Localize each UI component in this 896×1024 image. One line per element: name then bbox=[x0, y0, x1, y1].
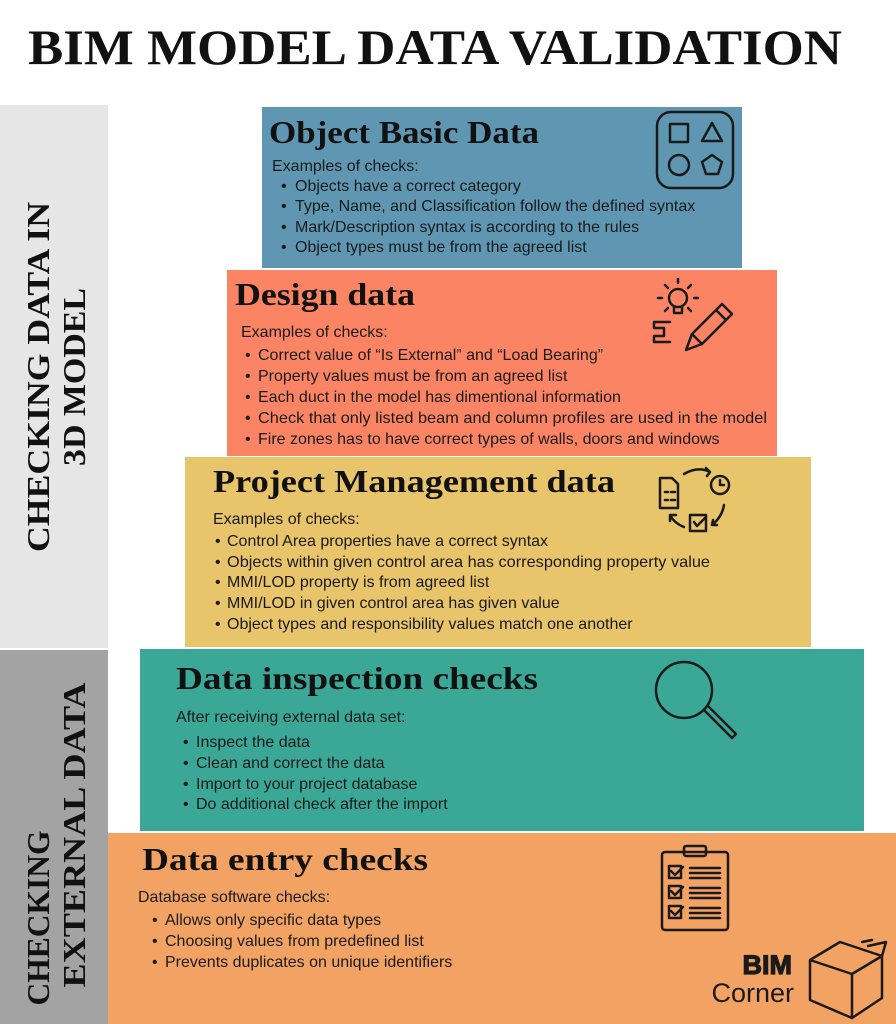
text: entry checks: Choosing values from predefined list bbox=[165, 933, 424, 950]
text: entry checks: Database software checks: bbox=[138, 889, 330, 906]
sidebar: checking data in 3D model: CHECKING DATA IN bbox=[20, 202, 56, 552]
heading: design data: Design data bbox=[235, 276, 415, 312]
sidebar: checking external data bbox=[0, 650, 108, 1024]
text: project management checks: • bbox=[215, 533, 221, 550]
sidebar: checking data in 3D model: 3D MODEL bbox=[56, 288, 92, 466]
text: design checks: Property values must be from an agreed list bbox=[258, 368, 568, 385]
text: inspection steps: Import to your project database bbox=[196, 776, 418, 793]
text: project management checks: • bbox=[215, 595, 221, 612]
heading: project management data: Project Management data bbox=[213, 463, 615, 499]
icon: lightbulb and pencil bbox=[654, 279, 732, 350]
sidebar: checking external data: CHECKING bbox=[20, 830, 56, 1006]
text: entry checks bbox=[138, 889, 452, 971]
text: design checks bbox=[241, 324, 767, 448]
text: design checks: Each duct in the model has dimentional information bbox=[258, 389, 621, 406]
text: inspection steps bbox=[176, 709, 448, 813]
text: entry checks: • bbox=[152, 912, 158, 929]
panel: design data bbox=[227, 270, 777, 456]
text: inspection steps: Clean and correct the data bbox=[196, 755, 385, 772]
text: object checks: • bbox=[281, 198, 287, 215]
panel: data entry checks bbox=[108, 833, 896, 1024]
title: BIM MODEL DATA VALIDATION bbox=[28, 19, 842, 75]
text: object checks: • bbox=[281, 219, 287, 236]
logo: BIM Corner: Corner bbox=[711, 978, 794, 1008]
logo: BIM Corner bbox=[711, 940, 886, 1018]
icon: shapes bbox=[657, 112, 733, 188]
text: object checks: • bbox=[281, 178, 287, 195]
sidebar: checking data in 3D model bbox=[0, 105, 108, 648]
text: object checks bbox=[272, 158, 695, 256]
text: project management checks: MMI/LOD in given control area has given value bbox=[227, 595, 560, 612]
text: entry checks: Prevents duplicates on unique identifiers bbox=[165, 954, 452, 971]
text: entry checks: Allows only specific data types bbox=[165, 912, 381, 929]
text: design checks: • bbox=[245, 410, 251, 427]
heading: data entry checks: Data entry checks bbox=[142, 841, 428, 877]
text: design checks: • bbox=[245, 431, 251, 448]
text: project management checks: Objects within given control area has corresponding property value bbox=[227, 554, 710, 571]
text: project management checks: Examples of checks: bbox=[213, 511, 360, 528]
text: project management checks: • bbox=[215, 554, 221, 571]
text: object checks: Examples of checks: bbox=[272, 158, 419, 175]
heading: data inspection checks: Data inspection checks bbox=[176, 660, 538, 696]
text: project management checks: • bbox=[215, 574, 221, 591]
text: object checks: Type, Name, and Classification follow the defined syntax bbox=[295, 198, 695, 215]
panel: project management data bbox=[185, 457, 811, 647]
sidebar: checking external data: EXTERNAL DATA bbox=[56, 682, 92, 988]
text: project management checks: • bbox=[215, 616, 221, 633]
text: object checks: • bbox=[281, 239, 287, 256]
text: entry checks: • bbox=[152, 954, 158, 971]
text: design checks: Correct value of “Is External” and “Load Bearing” bbox=[258, 347, 603, 364]
panel: object basic data bbox=[262, 107, 742, 268]
text: inspection steps: • bbox=[183, 734, 189, 751]
text: inspection steps: Do additional check after the import bbox=[196, 796, 448, 813]
text: project management checks bbox=[213, 511, 710, 633]
text: object checks: Mark/Description syntax is according to the rules bbox=[295, 219, 639, 236]
icon: cycle document clock bbox=[660, 468, 729, 531]
icon: magnifier bbox=[656, 662, 736, 738]
text: inspection steps: • bbox=[183, 796, 189, 813]
text: object checks: Object types must be from the agreed list bbox=[295, 239, 587, 256]
text: design checks: Check that only listed beam and column profiles are used in the model bbox=[258, 410, 767, 427]
text: design checks: • bbox=[245, 368, 251, 385]
text: entry checks: • bbox=[152, 933, 158, 950]
logo: BIM Corner: BIM bbox=[742, 950, 792, 980]
text: project management checks: Object types and responsibility values match one another bbox=[227, 616, 633, 633]
icon: clipboard checklist bbox=[662, 846, 728, 930]
text: design checks: Fire zones has to have correct types of walls, doors and windows bbox=[258, 431, 720, 448]
text: inspection steps: After receiving external data set: bbox=[176, 709, 405, 726]
text: design checks: • bbox=[245, 347, 251, 364]
text: project management checks: Control Area properties have a correct syntax bbox=[227, 533, 548, 550]
text: object checks: Objects have a correct category bbox=[295, 178, 521, 195]
text: design checks: Examples of checks: bbox=[241, 324, 388, 341]
text: inspection steps: • bbox=[183, 755, 189, 772]
text: inspection steps: Inspect the data bbox=[196, 734, 310, 751]
text: project management checks: MMI/LOD property is from agreed list bbox=[227, 574, 490, 591]
text: design checks: • bbox=[245, 389, 251, 406]
panel: data inspection checks bbox=[140, 649, 864, 831]
heading: object basic data: Object Basic Data bbox=[269, 114, 539, 150]
text: inspection steps: • bbox=[183, 776, 189, 793]
